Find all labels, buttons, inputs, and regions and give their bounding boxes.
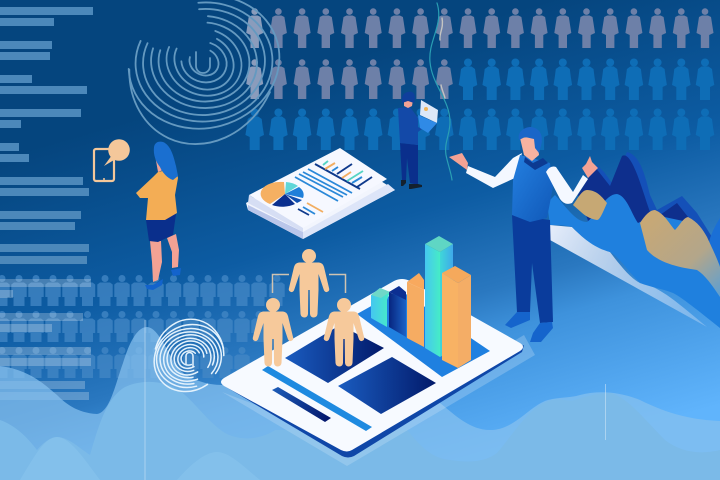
tablet shadow — [222, 335, 535, 466]
low wave bumps — [20, 437, 260, 480]
3D bar chart — [371, 236, 471, 368]
legs — [150, 234, 179, 282]
small legend lines — [298, 203, 323, 215]
blue strip — [262, 366, 372, 431]
blue chart base — [357, 290, 490, 377]
shoes — [401, 180, 422, 189]
face — [155, 155, 163, 172]
blue front ridge — [547, 194, 720, 328]
crowd of women icons, grey rows — [246, 8, 713, 99]
hair — [402, 92, 415, 103]
tablet face — [221, 279, 523, 452]
face — [404, 100, 413, 108]
lower crowd of people icons — [0, 275, 285, 378]
shoes — [145, 268, 181, 290]
tall teal bar — [425, 236, 453, 357]
woman standing with arms crossed — [136, 142, 181, 290]
peach people network — [253, 249, 364, 366]
right person — [324, 298, 364, 366]
tablet — [221, 279, 535, 466]
legs — [400, 143, 418, 185]
pie chart — [261, 182, 304, 207]
bracket connectors — [272, 274, 346, 293]
shoes — [505, 312, 553, 342]
gold peak one — [573, 190, 607, 220]
large orange bar — [442, 266, 471, 368]
jacket — [136, 168, 178, 220]
small man with laptop — [398, 92, 438, 189]
jacket — [398, 107, 422, 145]
hair — [154, 142, 178, 180]
skirt — [146, 214, 176, 242]
top sheet — [249, 148, 387, 228]
mini bar chart on report — [315, 161, 372, 189]
large fingerprint — [103, 0, 305, 169]
right arm — [546, 167, 588, 204]
left arm — [466, 153, 522, 188]
paper stack — [246, 152, 395, 239]
legs — [512, 215, 553, 323]
vest — [512, 155, 553, 222]
data bars: upper list — [0, 7, 93, 264]
mountain chart — [547, 152, 720, 328]
dark back ridge — [578, 155, 700, 240]
top person — [289, 249, 329, 318]
curved teal line — [430, 3, 452, 180]
dark panel two — [338, 357, 436, 414]
left person — [253, 298, 293, 366]
text lines on report — [295, 169, 352, 201]
front wave — [0, 382, 720, 480]
report documents — [246, 148, 395, 239]
dark strip — [272, 387, 331, 422]
right edge ridge — [708, 218, 720, 290]
collar — [524, 157, 548, 170]
face — [520, 136, 539, 161]
left hand — [449, 153, 468, 170]
light back ridge — [580, 152, 712, 262]
vertical highlight lines — [145, 320, 606, 480]
tablet edge — [221, 345, 524, 458]
hair — [519, 127, 542, 153]
crowd of women icons, blue rows — [245, 58, 714, 150]
laptop — [418, 100, 438, 133]
white shadow — [550, 225, 707, 327]
back wave — [0, 327, 720, 480]
small teal bar — [371, 288, 390, 327]
medium orange bar — [407, 273, 424, 347]
icon: phone with speech bubble — [94, 139, 130, 181]
small white fingerprint — [141, 311, 237, 405]
main presenter man — [449, 127, 598, 342]
right hand — [582, 156, 598, 178]
dark bar — [389, 286, 406, 337]
data bars: lower translucent list — [0, 279, 91, 400]
gold peak two — [640, 210, 720, 297]
dark panel one — [285, 325, 384, 383]
